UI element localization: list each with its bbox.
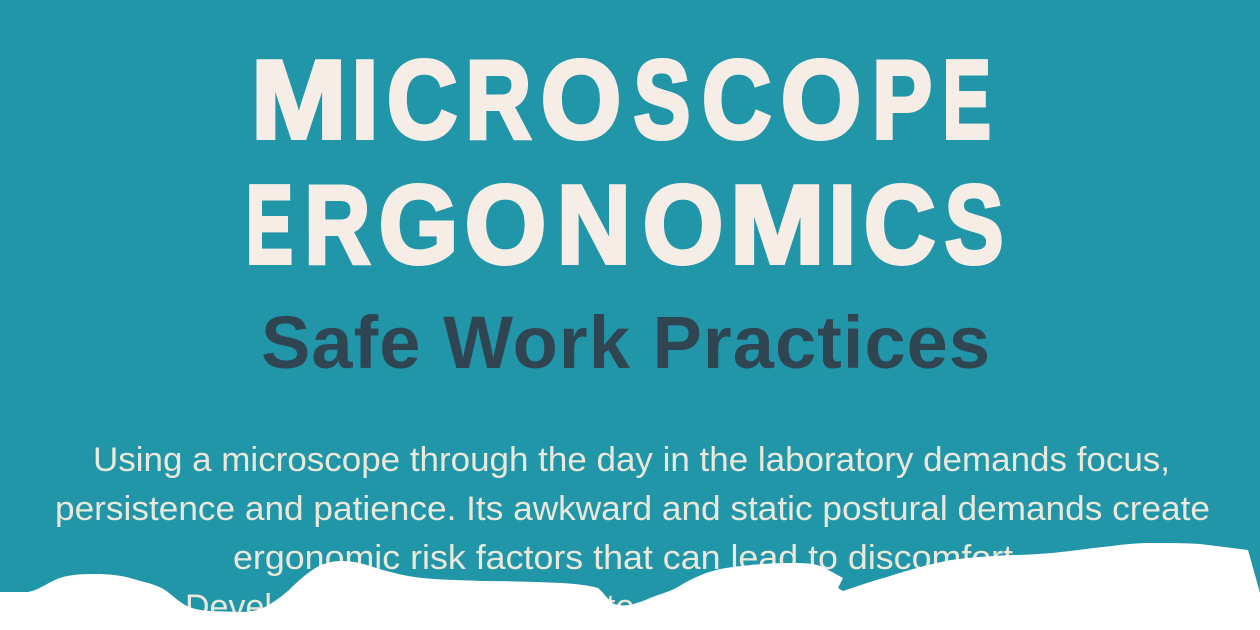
title: R: [304, 163, 370, 287]
title: [246, 38, 1003, 287]
title: I: [828, 163, 856, 287]
title: O: [541, 38, 621, 162]
title: C: [702, 38, 772, 162]
title: S: [945, 163, 1004, 287]
title: O: [643, 163, 723, 287]
subtitle: Safe Work Practices: [261, 301, 990, 384]
title: R: [465, 38, 531, 162]
intro paragraph: ergonomic risk factors that can lead to discomfort.: [233, 539, 1023, 577]
intro paragraph: persistence and patience. Its awkward and static postural demands create: [55, 490, 1210, 528]
title: P: [872, 38, 932, 162]
title: E: [246, 163, 293, 287]
title: C: [387, 38, 458, 162]
torn paper edge: [0, 543, 1260, 630]
title: O: [781, 38, 861, 162]
title: N: [557, 163, 631, 287]
intro paragraph: [55, 441, 1210, 626]
intro paragraph: to: [606, 588, 634, 626]
title: C: [864, 163, 936, 287]
title: I: [351, 38, 378, 162]
title: S: [634, 38, 690, 162]
title: M: [730, 163, 825, 287]
title: E: [942, 38, 991, 162]
intro paragraph: Developing: [185, 588, 355, 626]
intro paragraph: Using a microscope through the day in the laboratory demands focus,: [93, 441, 1170, 479]
title: O: [465, 163, 546, 287]
title: M: [251, 38, 347, 162]
title: G: [379, 163, 458, 287]
